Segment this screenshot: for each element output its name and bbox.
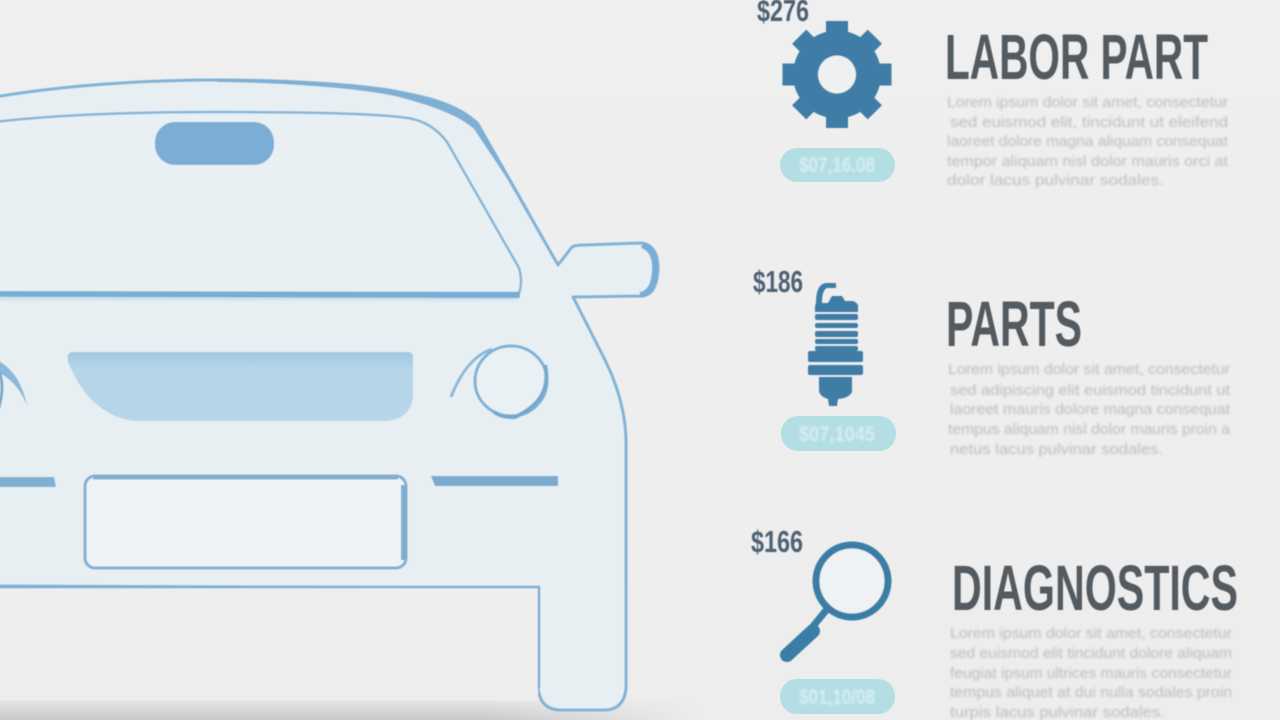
heading: parts: PARTS [946, 288, 1082, 360]
car illustration [0, 79, 658, 710]
icon: spark plug [808, 283, 863, 406]
car body silhouette [0, 80, 658, 710]
right bumper slot [431, 476, 558, 486]
left bumper slot [0, 477, 56, 487]
body text: labor: sed euismod elit, tincidunt ut eleifend [950, 114, 1228, 131]
price pill: labor [780, 148, 895, 182]
body text: parts: laoreet mauris dolore magna consequat [950, 401, 1231, 418]
headlight lower shade [494, 365, 546, 417]
body text: parts: Lorem ipsum dolor sit amet, consectetur [948, 361, 1230, 378]
body text: diagnostics [950, 625, 1232, 720]
left headlight lens [0, 370, 2, 410]
pill text: $07,16.08 [799, 154, 875, 177]
price pill: parts [781, 416, 896, 451]
body text: labor: dolor lacus pulvinar sodales. [947, 172, 1164, 189]
license plate [85, 476, 406, 568]
right headlight [451, 346, 547, 417]
headlight swoosh [451, 349, 492, 397]
left headlight [0, 360, 27, 405]
body text: parts: sed adipiscing elit euismod tincidunt ut [950, 382, 1231, 399]
plate top shade [93, 474, 398, 480]
price pill: diagnostics [780, 679, 895, 714]
item: parts [753, 264, 1231, 458]
body text: labor [947, 94, 1229, 189]
body text: parts [948, 361, 1231, 458]
body text: diagnostics: tempus aliquet at dui nulla sodales proin [950, 684, 1232, 701]
roof shading [217, 79, 532, 216]
body text: labor: Lorem ipsum dolor sit amet, consectetur [947, 94, 1228, 111]
side mirror shading [640, 245, 655, 295]
pill text: $07,1045 [799, 423, 875, 446]
body text: parts: netus lacus pulvinar sodales. [950, 441, 1163, 458]
body text: diagnostics: sed euismod elit tincidunt dolore aliquam [950, 645, 1232, 662]
body text: parts: tempus aliquam nisl dolor mauris proin a [948, 421, 1231, 438]
body text: diagnostics: Lorem ipsum dolor sit amet, consectetur [950, 625, 1232, 642]
body text: labor: laoreet dolore magna aliquam consequat [947, 133, 1229, 150]
pill text: $01,10/08 [799, 686, 875, 709]
body text: labor: tempor aliquam nisl dolor mauris orci at [947, 153, 1229, 170]
windshield [0, 112, 521, 304]
icon: magnifying glass [787, 545, 888, 655]
body text: diagnostics: feugiat ipsum ultrices mauris consectetur [950, 665, 1232, 682]
lower bumper cut-out [0, 588, 538, 700]
windshield under shade [0, 298, 518, 304]
price: parts: $186 [753, 264, 803, 299]
grille [68, 352, 413, 421]
windshield base line [0, 294, 520, 295]
floor shadow [0, 701, 651, 720]
price: diagnostics: $166 [751, 524, 803, 559]
plate right shade [401, 485, 407, 560]
lower bumper line [0, 587, 539, 688]
item: diagnostics [751, 524, 1238, 720]
item: labor part [757, 0, 1229, 189]
rearview mirror [155, 122, 274, 165]
icon: gear [782, 21, 892, 128]
